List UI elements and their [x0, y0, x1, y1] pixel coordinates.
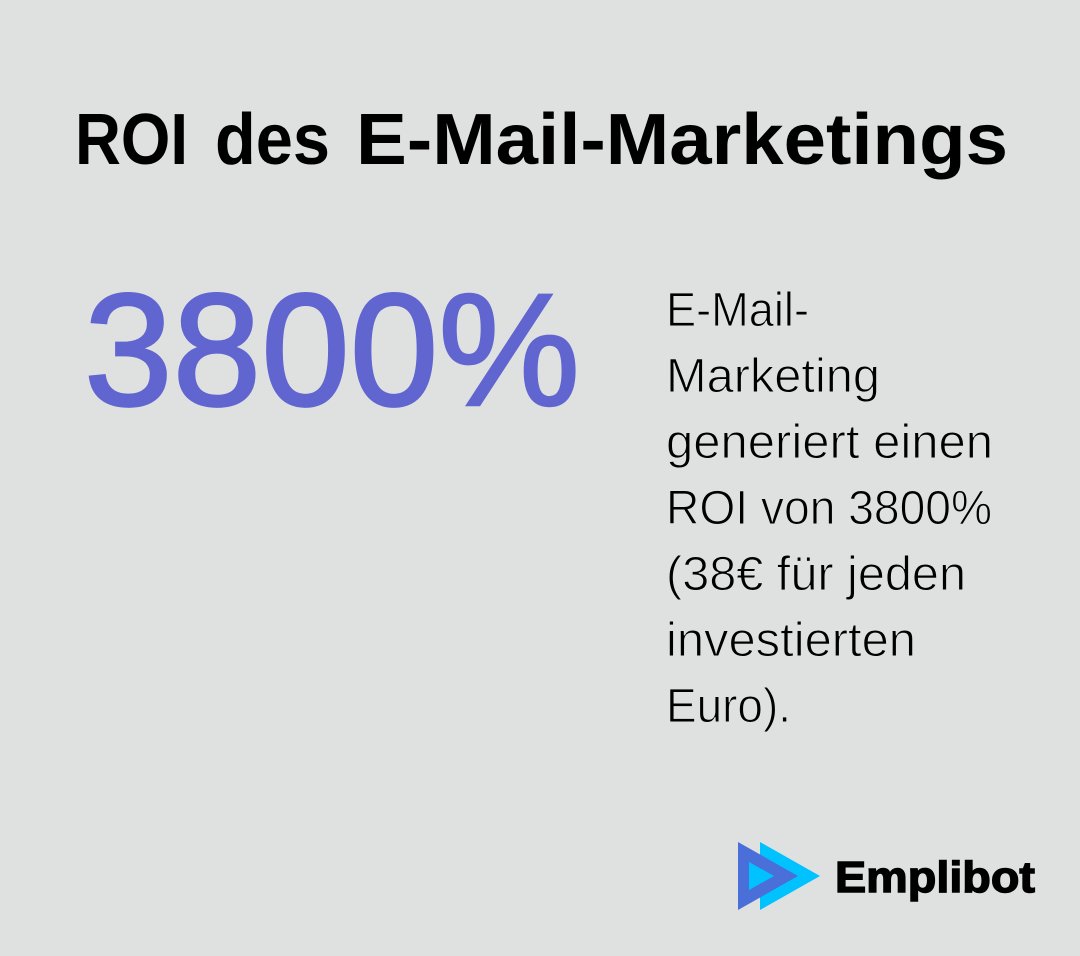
big number: 3800%: 3800%: [84, 260, 580, 439]
logo: Emplibot: [738, 842, 1035, 910]
description text: investierten: [666, 614, 916, 667]
logo wordmark: Emplibot: [835, 853, 1035, 902]
title: E-Mail-Marketings: [356, 100, 1008, 180]
title: ROI: [75, 100, 188, 180]
description text: generiert einen: [666, 416, 993, 469]
description text: [666, 284, 993, 733]
description text: (38€ für jeden: [666, 548, 966, 601]
title: des: [215, 100, 330, 180]
icon: play triangles: [738, 842, 820, 910]
description text: Euro).: [666, 680, 791, 733]
description text: E-Mail-: [666, 284, 809, 337]
description text: ROI von 3800%: [666, 482, 992, 535]
description text: Marketing: [666, 350, 880, 403]
